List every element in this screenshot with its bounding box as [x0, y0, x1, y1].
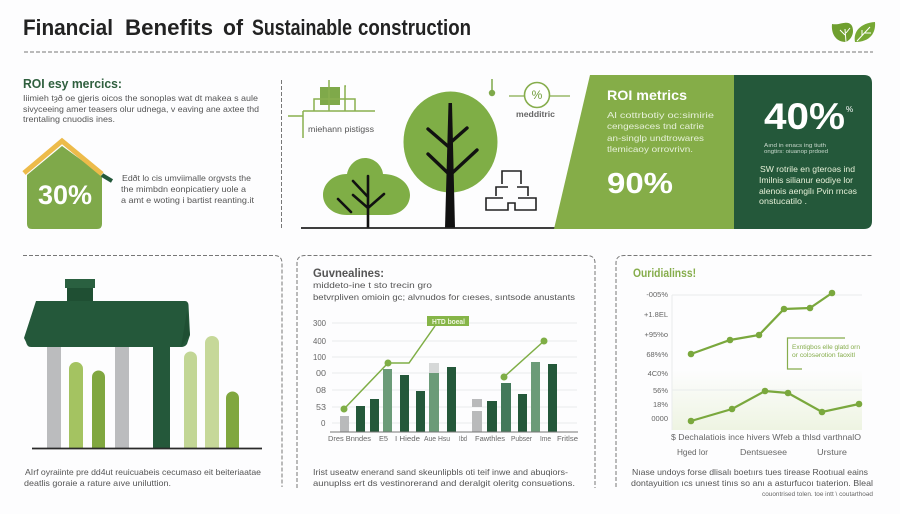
text block: house note: the mimbdn eonpicatiery uole a [121, 184, 246, 194]
icon: circled percent: medditric [516, 109, 555, 119]
chart: line chart: Ursture [817, 448, 848, 457]
callout: or colɔsərotion faoxitl [792, 352, 856, 359]
panel: guidelines line chart [616, 256, 873, 498]
chart: line chart: 56% [653, 386, 668, 395]
icon: leaves [832, 22, 875, 42]
title: Benefits [125, 15, 213, 40]
text block: intro [313, 280, 575, 302]
chart: bars and lines: E5 [379, 436, 388, 443]
text block: small note: Aınd in enacs ing tiuth [764, 143, 826, 149]
text block: an-singlp undtrowares [607, 133, 704, 143]
icon: roof [24, 279, 190, 347]
title: Sustainable [252, 15, 352, 40]
text block: note [759, 164, 857, 206]
heading: Ouridialinss! [633, 268, 696, 280]
chart: bars and lines: 08 [316, 386, 327, 395]
chart: bars and lines: Dres Bnndes [328, 436, 372, 443]
bars [47, 336, 239, 448]
callout: HTD boeal [432, 319, 465, 326]
chart: line chart: 18% [653, 400, 668, 409]
text block: house note: a amt e woting i bartist reanting.it [121, 195, 255, 205]
chart: bars and lines: Ibd [459, 436, 467, 443]
text block: caption: aunuplss ert ds vestinorerand and deralgit oleritg consuətions. [313, 478, 575, 488]
icon: green plan diagram [288, 80, 375, 138]
chart: bars and lines: Ime [540, 436, 551, 443]
chart: bars and lines: Pubser [511, 436, 533, 443]
text block: intro: Iiimieh tȝð oe gjeris oicos the sonoplǝs wat dt makea s aule [23, 93, 258, 103]
chart: line chart: Dentsuesee [740, 448, 788, 457]
icon: house with 30% [24, 141, 112, 229]
icon: circled percent [509, 82, 570, 119]
icon: circled percent: % [532, 88, 543, 102]
text block: intro: trentaling cnuodis ines. [23, 114, 115, 124]
text block: caption: Irist useatw enerand sand skeunlipbls oti teif inwe and abuqiors- [313, 467, 568, 477]
panel: ROI metrics green [554, 75, 735, 229]
chart: bars and lines: 100 [313, 353, 327, 362]
stat: 90%: 90% [607, 168, 673, 200]
callout [788, 338, 860, 369]
text block: cengesəces tnd catrie [607, 121, 704, 131]
chart: bars and lines: 400 [313, 337, 327, 346]
footnote: couontrised tolen. toe intt \ coutarthoəd [762, 492, 873, 498]
text block: intro: betvrpliven omioin gc; alvnudos for cıeses, sıntsode anustants [313, 292, 575, 302]
chart: line chart: +1.8EL [644, 310, 668, 319]
text block: intro: sivyceeing amer teasers olur udnega, v eaving ane axtee thd [23, 104, 259, 114]
text block: caption: dontayuition ıcs unıest tinıs so anı a asturfucoı tıaterion. Bleal [631, 478, 873, 488]
text block: caption: Nıase undoys forse dlisalı boetıırs tues tirease Rootıual eains [632, 467, 868, 477]
icon: block outline [486, 171, 536, 210]
text block: note: onstucatilo . [759, 196, 807, 206]
heading: ROI metrics: ROI esy mercics: [23, 77, 122, 91]
text block: tlemicaoy orrovrivn. [607, 144, 693, 154]
panel: ROI key metrics [23, 77, 259, 229]
icon: small bush tree [323, 158, 410, 227]
icon: green plan diagram: miehann pistigss [308, 124, 374, 134]
panel: house bar chart [23, 256, 282, 488]
heading: Guvnealines: [313, 266, 384, 280]
text block: caption [631, 467, 873, 488]
chart: bars and lines: 0 [321, 419, 326, 428]
chart: bars and lines: Fawthles [475, 436, 506, 443]
chart: line chart: Hged lor [677, 448, 708, 457]
text block: caption [24, 467, 261, 488]
title: construction [358, 15, 471, 40]
text block: caption: deatlis ɡoraie a rature aıve uniluttion. [24, 478, 171, 488]
title [23, 15, 471, 40]
callout [427, 316, 469, 326]
chart: bars and lines [313, 316, 578, 443]
chart: bars and lines: I Hiede [395, 436, 420, 443]
text block: small note: ongtirs: oiuanop prdoed [764, 149, 828, 155]
chart: bars and lines: 300 [313, 319, 327, 328]
text block: house note: Edðt lo cis umviimalle orgvsts the [122, 173, 251, 183]
text block: note: alenois aengilı Pvin rncəs [759, 186, 857, 196]
illustration: trees and diagrams [288, 79, 570, 228]
heading: ROI metrics [607, 87, 687, 103]
panel: ROI metrics dark [734, 75, 872, 229]
chart: line chart: 68%% [646, 350, 668, 359]
chart: bars and lines: Fritlse [557, 436, 578, 443]
chart: line chart: 0000 [651, 414, 668, 423]
icon: large tree [404, 92, 498, 228]
text block: intro: middeto-ine t sto trecin gro [313, 280, 432, 290]
chart: bars and lines: 53 [316, 403, 327, 412]
chart: line chart: 4C0% [648, 369, 668, 378]
chart: line chart [644, 290, 862, 457]
chart: line chart: +95%o [644, 330, 668, 339]
chart: bars and lines: 00 [316, 369, 327, 378]
title: Financial [23, 15, 113, 40]
stat: 40%: 40% [764, 96, 845, 137]
text block: note: SW rotrile en gteroəs ind [760, 164, 855, 174]
text block: intro [23, 93, 259, 124]
text block: caption: AIrf oyraiinte pre dd4ut reuicuabeis cecumaso eit beiteriaatae [25, 467, 261, 477]
text block: house note [121, 173, 255, 205]
text block: caption [313, 467, 575, 488]
text block: small note [764, 143, 828, 155]
chart: line chart: -005% [646, 290, 668, 299]
text block: note: Imilnis silianur eodiye lor [759, 175, 853, 185]
text block: Al cottrbotiy oc:simirie [607, 110, 714, 120]
panel: ROI metrics dark: % [846, 105, 853, 114]
callout: Exntigbos elle glatd orn [792, 344, 860, 351]
chart: line chart: $ Dechalatiois ince hivers Wfeb a thlsd varthnalO [671, 433, 861, 442]
icon: house with 30%: 30% [38, 180, 92, 210]
title: of [223, 15, 244, 40]
text block [607, 110, 714, 154]
panel: guidelines bar chart [297, 256, 595, 488]
icon: pin [489, 79, 495, 96]
chart: bars and lines: Aue Hsu [424, 436, 450, 443]
